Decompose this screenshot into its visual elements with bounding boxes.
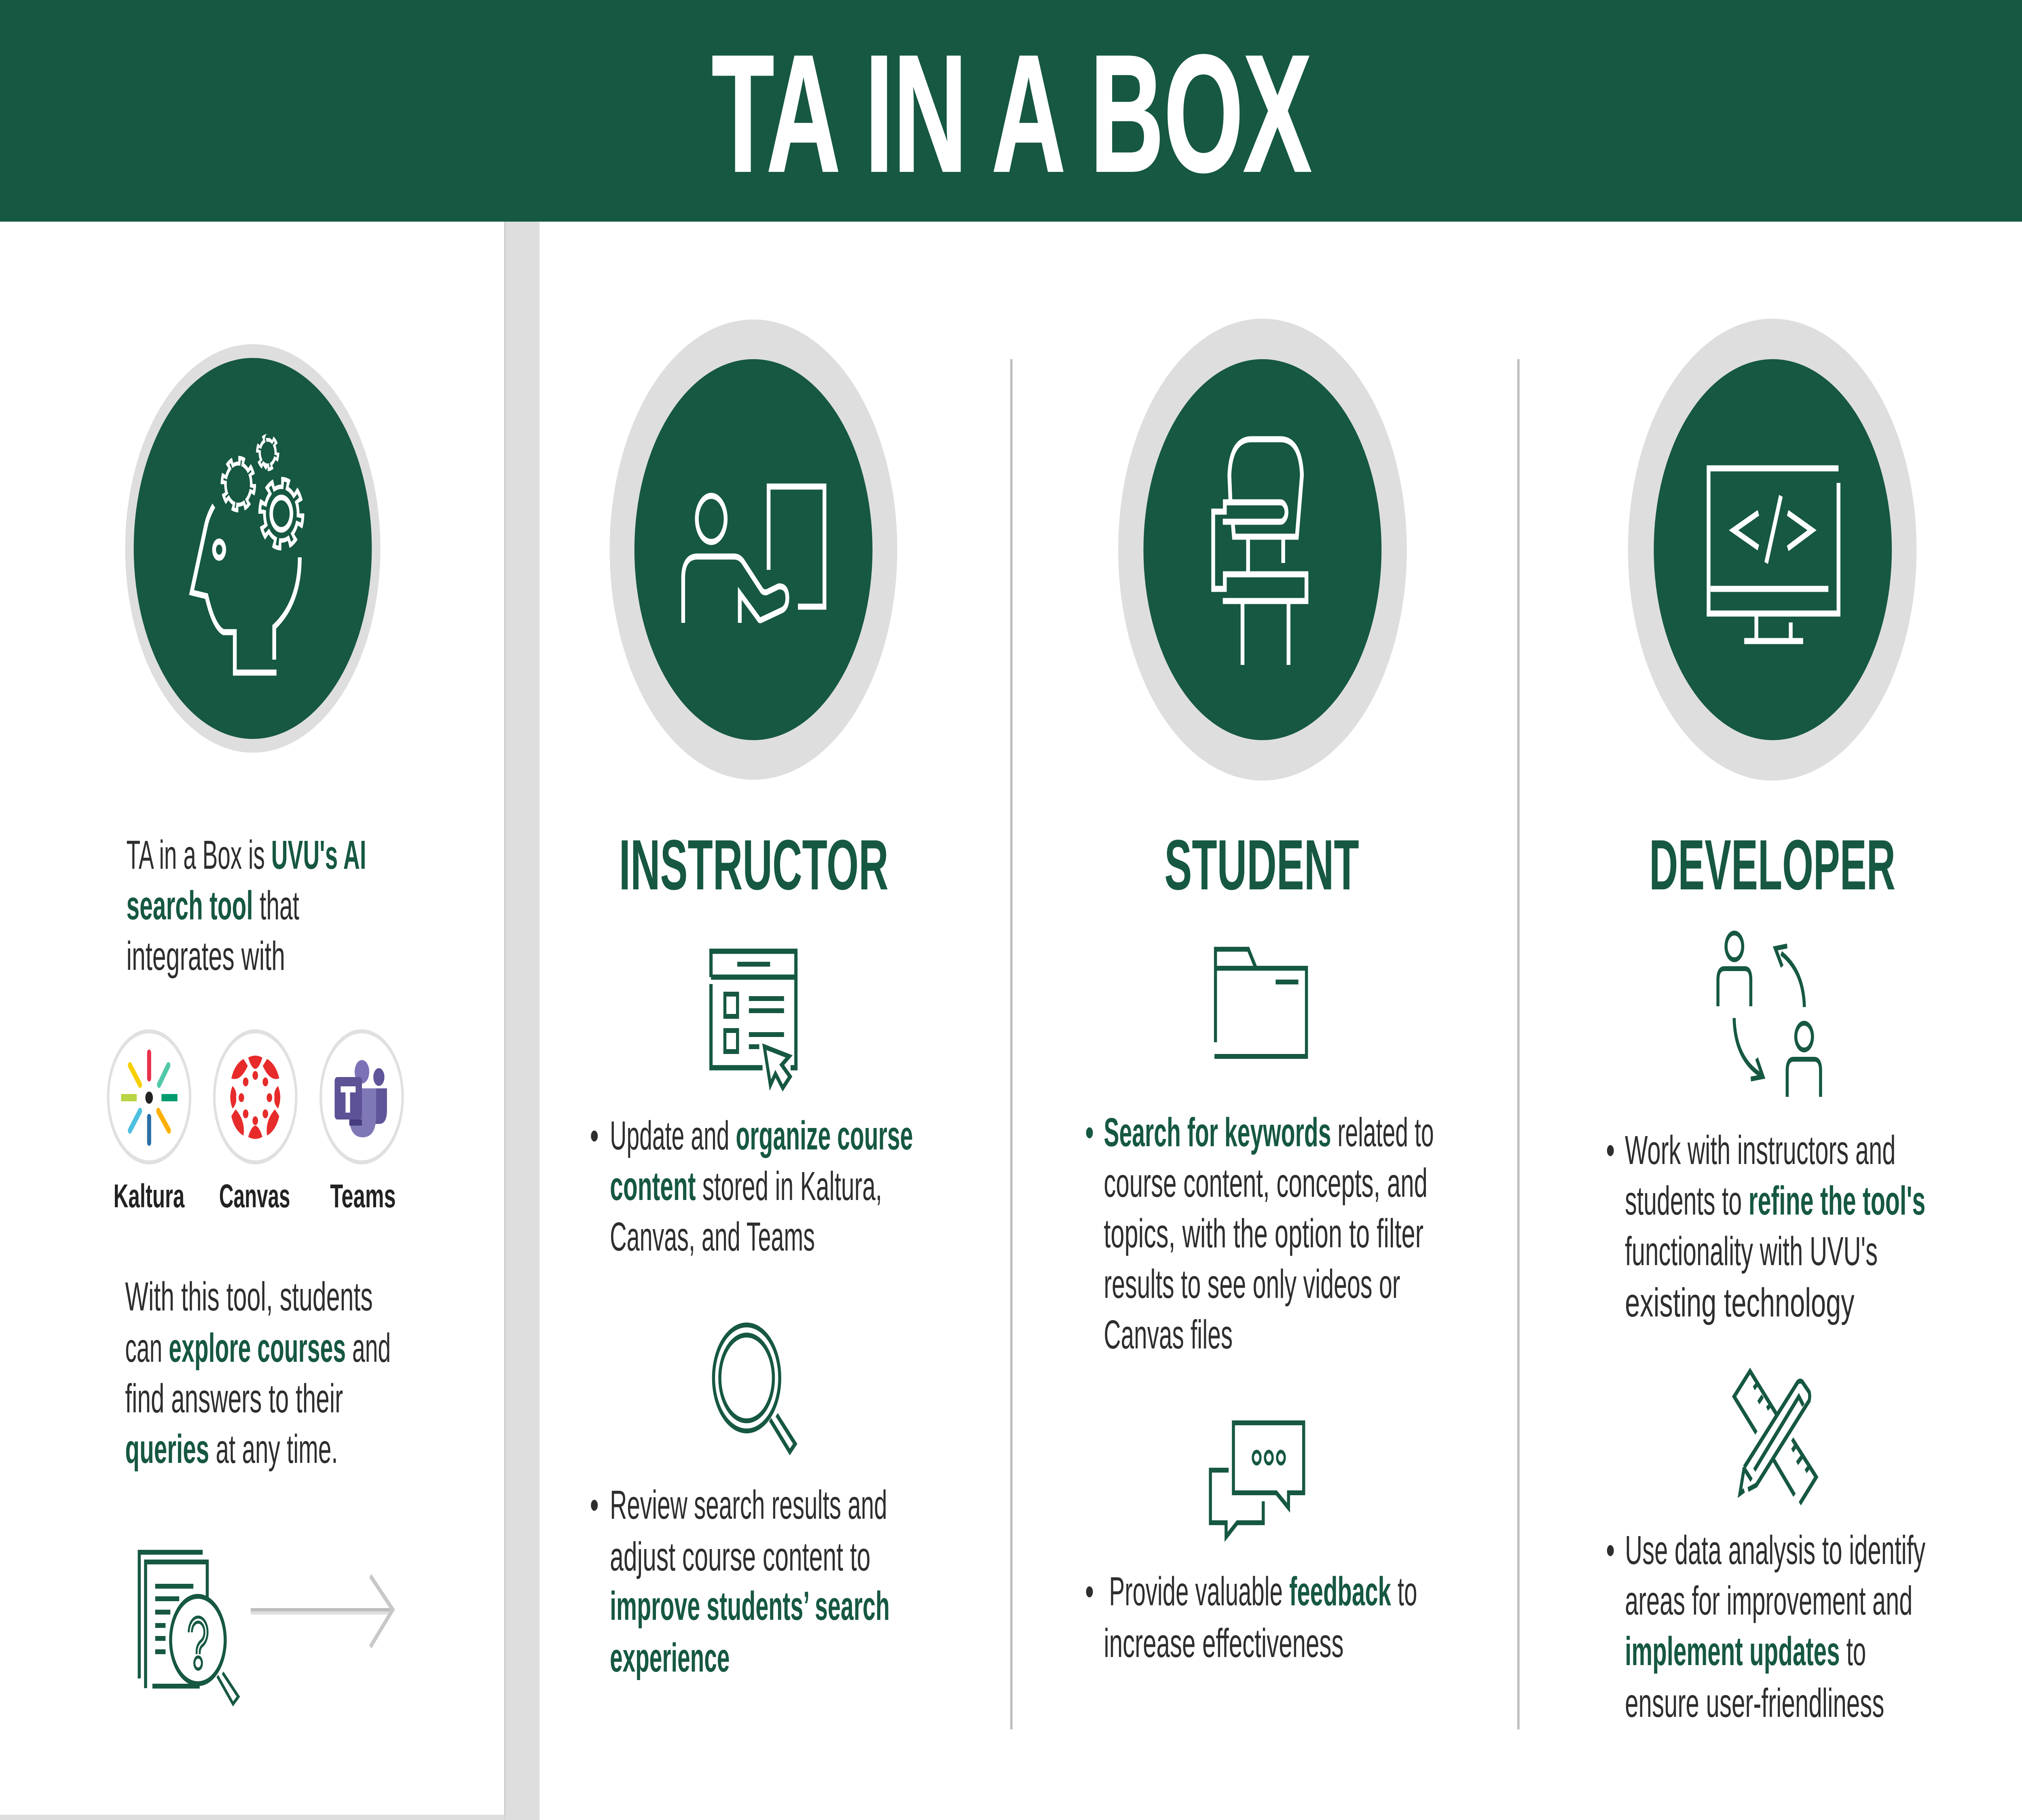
text: review: adjust course content to — [610, 1534, 870, 1579]
left panel shadow bar — [0, 222, 539, 1820]
text: organize: • — [590, 1113, 599, 1158]
text: implement — [1606, 1528, 1925, 1726]
text: feedback — [1085, 1569, 1417, 1666]
text: implement: ensure user-friendliness — [1625, 1680, 1884, 1726]
heading: student: STUDENT — [1164, 825, 1359, 905]
panel: about the tool — [108, 344, 403, 1704]
text: implement: • — [1606, 1528, 1615, 1573]
text: refine: Work with instructors and — [1625, 1128, 1896, 1173]
icon: folder — [1214, 949, 1307, 1056]
intro text: TA in a Box is UVU's AI — [126, 832, 366, 878]
text: feedback: Provide valuable feedback to — [1109, 1569, 1417, 1614]
icon: chat bubbles — [1210, 1423, 1304, 1537]
text: organize: Canvas, and Teams — [610, 1214, 815, 1259]
text: search keywords: course content, concepts, and — [1104, 1160, 1428, 1206]
text: organize — [590, 1113, 913, 1259]
text: feedback: • — [1085, 1569, 1094, 1614]
text: review — [590, 1482, 890, 1680]
icon: pencil and ruler — [1734, 1371, 1816, 1504]
logo: Canvas — [214, 1031, 296, 1215]
icon: instructor at board — [610, 320, 897, 780]
text: search keywords: • — [1085, 1110, 1094, 1155]
text: implement: areas for improvement and — [1625, 1578, 1912, 1623]
icon: monitor with code — [1628, 319, 1916, 781]
text: organize: content stored in Kaltura, — [610, 1164, 882, 1209]
text: search keywords: Canvas files — [1104, 1312, 1233, 1357]
icon: users exchanging — [1718, 933, 1821, 1097]
text: implement: Use data analysis to identify — [1625, 1528, 1925, 1573]
text: organize: Update and organize course — [610, 1113, 913, 1158]
text: search keywords: topics, with the option to filter — [1104, 1211, 1423, 1256]
text: search keywords: Search for keywords related to — [1104, 1110, 1434, 1155]
icon: student desk chair — [1118, 319, 1407, 781]
text: refine: existing technology — [1625, 1280, 1855, 1325]
panel: instructor — [590, 320, 913, 1680]
title banner — [0, 0, 2022, 222]
logo: Kaltura: Kaltura — [114, 1178, 185, 1215]
explore text: queries at any time. — [125, 1426, 338, 1472]
text: review: improve students’ search — [610, 1583, 890, 1629]
intro text — [126, 832, 366, 979]
heading: developer: DEVELOPER — [1649, 825, 1895, 905]
intro text: integrates with — [126, 933, 285, 979]
text: implement: implement updates to — [1625, 1629, 1866, 1674]
logo: Teams — [321, 1031, 403, 1215]
icon: magnifying glass — [713, 1325, 795, 1452]
title banner: TA IN A BOX — [712, 20, 1312, 207]
text: feedback: increase effectiveness — [1104, 1621, 1344, 1666]
heading: instructor: INSTRUCTOR — [619, 825, 888, 905]
icon: browser with cursor — [711, 951, 796, 1088]
text: refine: functionality with UVU's — [1625, 1229, 1878, 1274]
icon: documents with question magnifier — [139, 1552, 238, 1704]
explore text: can explore courses and — [125, 1325, 391, 1371]
panel: developer — [1606, 319, 1925, 1726]
logo: Teams: Teams — [330, 1178, 396, 1215]
explore text — [125, 1274, 391, 1472]
explore text: With this tool, students — [125, 1274, 373, 1319]
arrow — [251, 1576, 393, 1647]
text: search keywords: results to see only videos or — [1104, 1261, 1400, 1307]
text: refine: students to refine the tool's — [1625, 1178, 1925, 1223]
text: review: experience — [610, 1635, 730, 1680]
panel: student — [1085, 319, 1434, 1666]
text: review: • — [590, 1482, 599, 1528]
logo: Canvas: Canvas — [219, 1178, 290, 1215]
logo: Kaltura — [108, 1031, 190, 1215]
text: refine — [1606, 1128, 1925, 1325]
text: search keywords — [1085, 1110, 1434, 1357]
explore text: find answers to their — [125, 1376, 343, 1421]
text: refine: • — [1606, 1128, 1615, 1173]
text: review: Review search results and — [610, 1482, 887, 1528]
icon: head with gears — [125, 344, 381, 753]
intro text: search tool that — [126, 883, 299, 928]
